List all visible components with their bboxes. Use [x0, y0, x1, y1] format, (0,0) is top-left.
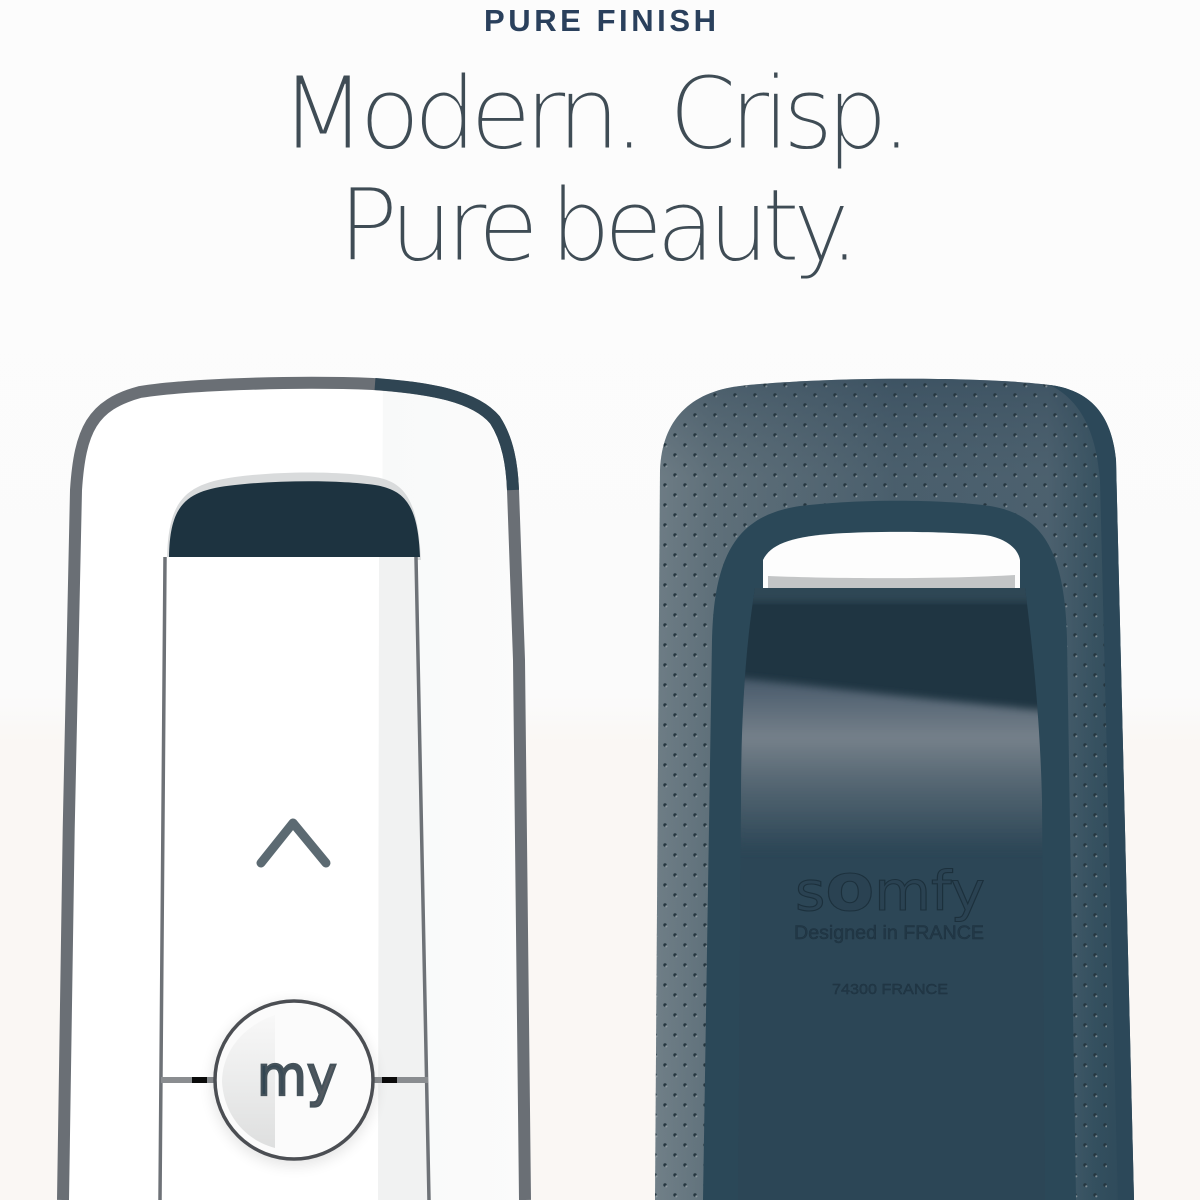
back shading: [655, 379, 1134, 1200]
divider right mark: [382, 1077, 397, 1083]
my button shadow: [212, 1002, 376, 1166]
button face: [160, 557, 429, 1200]
translucent top band: [753, 588, 1026, 602]
my label: my: [257, 1044, 337, 1108]
dark upper panel: [745, 601, 1038, 710]
headline line 2: Pure: [338, 167, 532, 284]
headline line 1: Modern.: [280, 55, 638, 172]
grey plate: [768, 575, 1015, 590]
postcode: 74300 FRANCE: [832, 981, 948, 998]
collar: [703, 501, 1076, 1200]
headline: [280, 55, 905, 284]
somfy wordmark: somfy: [795, 849, 985, 926]
inner panel: [741, 588, 1042, 838]
button face reflection: [378, 557, 429, 1200]
remote back (dark): [655, 376, 1134, 1200]
back body: [655, 379, 1134, 1200]
right side light reflection: [378, 385, 525, 1200]
divider right: [374, 1077, 428, 1083]
dots: [655, 376, 1107, 1200]
up arrow: [261, 823, 326, 863]
button window highlight: [167, 472, 421, 560]
my button: [215, 1001, 373, 1159]
panel base: [730, 588, 1060, 1200]
designed in france: Designed in FRANCE: [794, 923, 984, 944]
headline line 1: Crisp.: [669, 55, 905, 172]
eyebrow: PURE FINISH: PURE FINISH: [484, 3, 716, 38]
divider left: [161, 1077, 217, 1083]
somfy logo: [794, 849, 985, 998]
dotted texture: [655, 376, 1107, 1200]
button face edges: [160, 557, 429, 1200]
right dark edge: [1050, 385, 1134, 1200]
front body: [63, 383, 525, 1200]
my button reflection: [222, 1015, 275, 1148]
opening: [763, 532, 1020, 590]
panel reflection: [735, 678, 1050, 850]
rim: [63, 383, 525, 1200]
dark window cap: [169, 481, 420, 557]
divider left mark: [192, 1077, 207, 1083]
dark rim segment top right: [375, 384, 513, 490]
remote front (white): [63, 383, 525, 1200]
headline line 2: beauty.: [550, 167, 853, 284]
